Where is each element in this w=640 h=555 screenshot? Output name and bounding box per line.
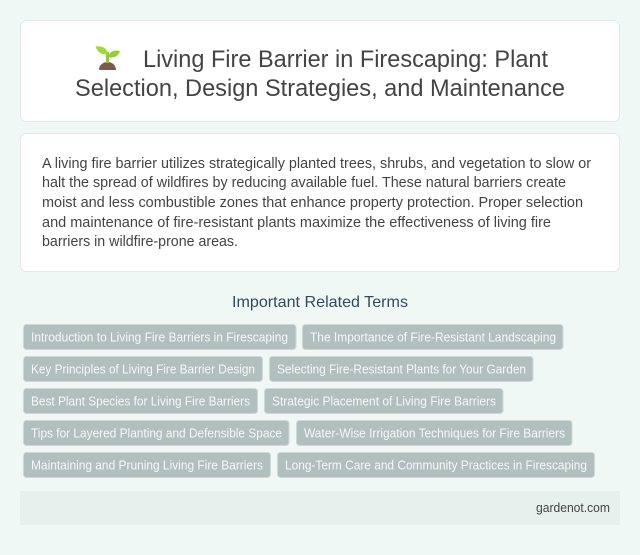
tag (278, 452, 594, 478)
tag (24, 356, 262, 382)
tag (296, 420, 572, 446)
tag (270, 356, 533, 382)
title (75, 46, 565, 102)
tag: Strategic Placement of Living Fire Barriers (272, 394, 496, 408)
tag: Tips for Layered Planting and Defensible Space (31, 426, 282, 440)
footer: gardenot.com (536, 501, 610, 515)
panel: title card (20, 20, 620, 122)
icon: sprout (96, 46, 120, 70)
tag: Introduction to Living Fire Barriers in Firescaping (31, 330, 288, 344)
tag (264, 388, 503, 414)
title: Selection, Design Strategies, and Maintenance (75, 75, 565, 102)
title: Living Fire Barrier in Firescaping: Plant (143, 46, 548, 73)
text block: description: and maintenance of fire-resistant plants maximize the effectiveness of living fire (42, 215, 551, 231)
text block: description (42, 156, 591, 250)
tag: Maintaining and Pruning Living Fire Barriers (31, 458, 263, 472)
tag: Water-Wise Irrigation Techniques for Fire Barriers (304, 426, 565, 440)
text block: description: barriers in wildfire-prone areas. (42, 234, 238, 250)
panel: description (20, 134, 620, 272)
tag: Key Principles of Living Fire Barrier Design (31, 362, 255, 376)
tag (24, 420, 289, 446)
tag: Best Plant Species for Living Fire Barriers (31, 394, 250, 408)
footer (20, 491, 620, 525)
text block: description: moist and less combustible zones that enhance property protection. Proper selection (42, 195, 583, 211)
tag (24, 452, 270, 478)
heading: important related terms: Important Related Terms (232, 294, 408, 311)
text block: description: A living fire barrier utilizes strategically planted trees, shrubs, and vegetation to slow or (42, 156, 591, 172)
tag: Long-Term Care and Community Practices in Firescaping (285, 458, 587, 472)
tag (24, 324, 296, 350)
tag: Selecting Fire-Resistant Plants for Your Garden (277, 362, 526, 376)
tag: The Importance of Fire-Resistant Landscaping (310, 330, 556, 344)
tag list (24, 324, 594, 478)
tag (302, 324, 563, 350)
text block: description: halt the spread of wildfires by reducing available fuel. These natural barriers create (42, 175, 566, 191)
tag (24, 388, 258, 414)
